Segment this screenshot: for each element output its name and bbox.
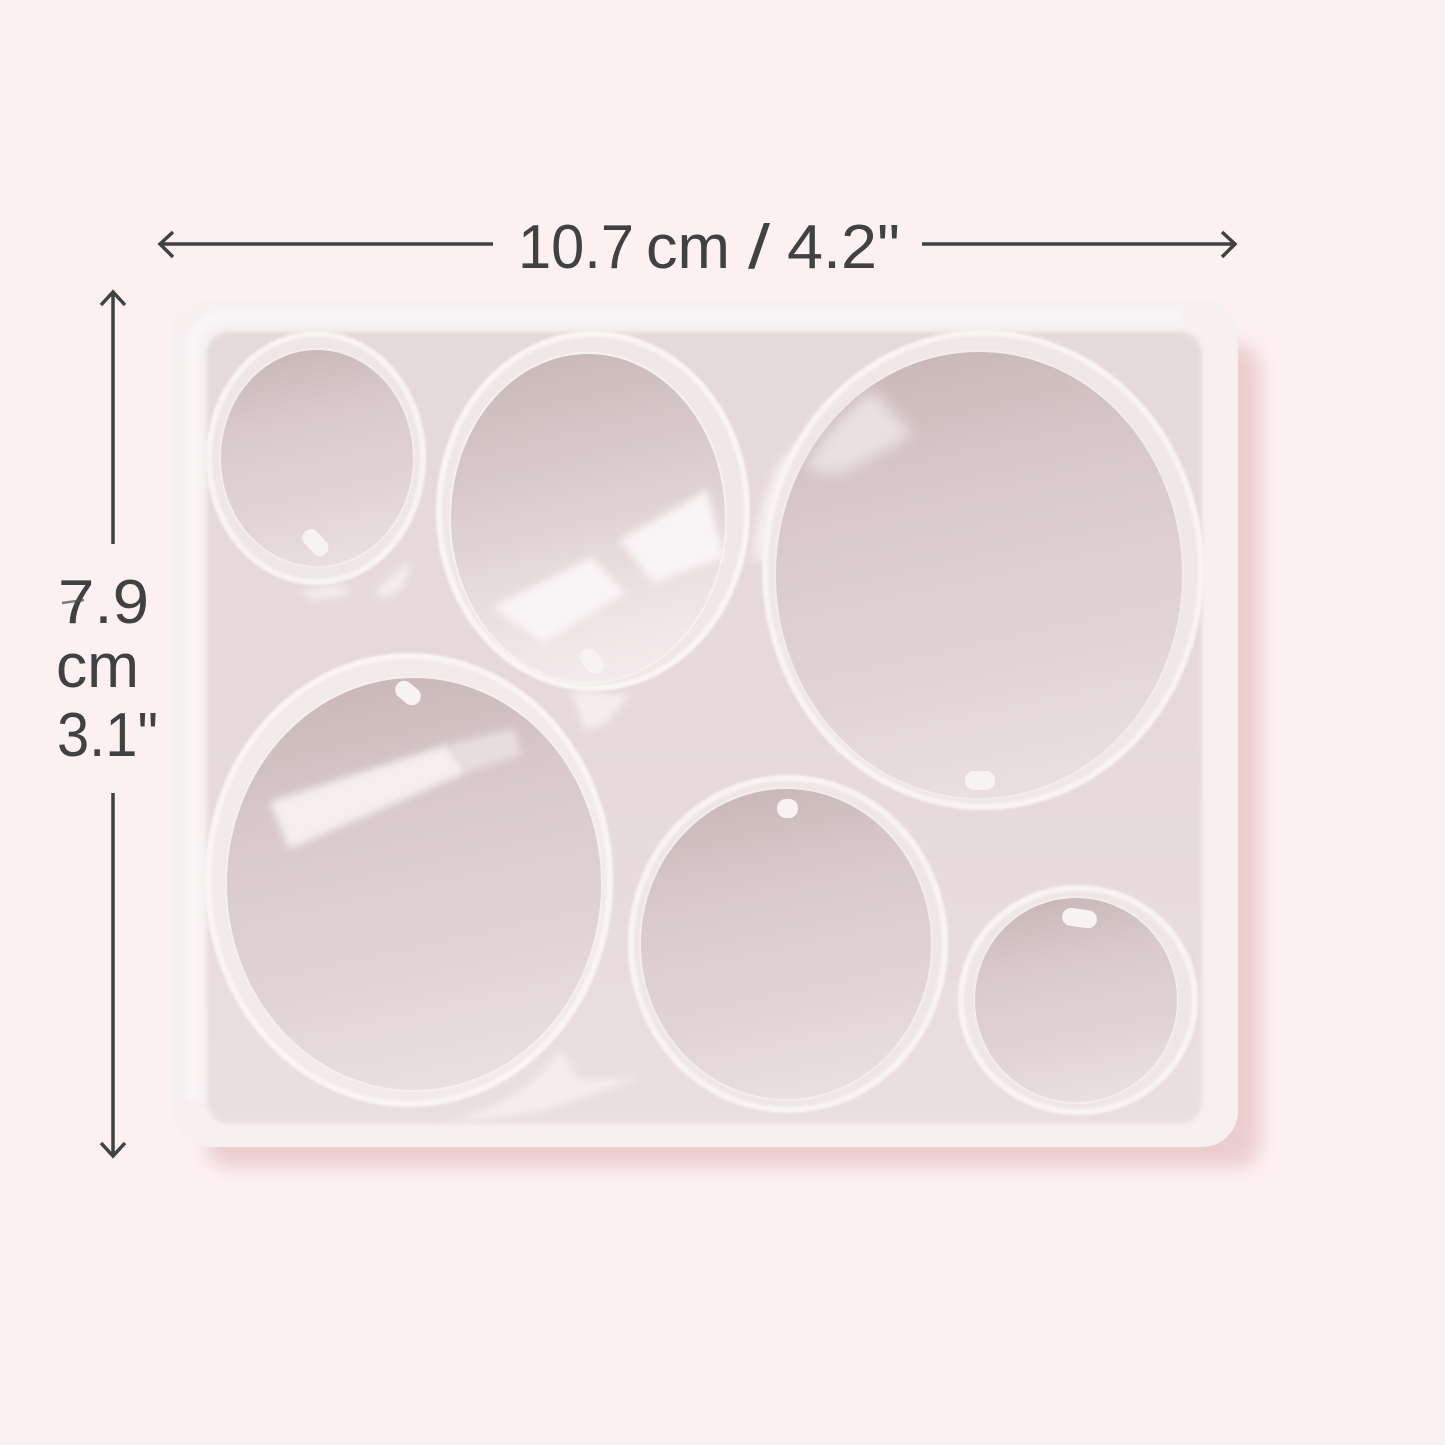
height label: 3.1" <box>57 701 158 770</box>
width label: 4.2" <box>787 213 900 282</box>
cavity: bottom right circle <box>961 888 1195 1112</box>
reflection <box>805 390 913 475</box>
width arrow left <box>160 232 493 257</box>
silicone mold <box>172 300 1238 1147</box>
cavity: top right circle <box>765 333 1201 807</box>
height dimension <box>56 292 158 1156</box>
lens <box>775 351 1183 799</box>
height label: cm <box>56 632 139 701</box>
ring <box>631 778 945 1110</box>
height label <box>56 568 158 770</box>
height label: 7.9 <box>58 568 149 637</box>
mold shadow <box>206 345 1260 1167</box>
rim highlight <box>193 316 1180 1100</box>
window reflection <box>493 490 724 643</box>
width dimension <box>160 213 1235 282</box>
width arrow right <box>922 232 1235 257</box>
width label: cm <box>646 213 730 282</box>
floor reflection streaks <box>300 395 830 1125</box>
width label: 10.7 <box>518 213 634 282</box>
cavity: top left circle <box>209 334 423 582</box>
lens <box>974 897 1178 1103</box>
lens <box>220 349 414 567</box>
hanging peg <box>391 677 425 709</box>
mold outer tray <box>172 300 1238 1147</box>
lens <box>450 353 726 683</box>
ring <box>208 656 610 1104</box>
hanging peg <box>777 799 798 818</box>
ring <box>439 334 747 688</box>
lens <box>640 788 932 1100</box>
window reflection <box>446 728 522 772</box>
width label: / <box>748 213 771 282</box>
hanging peg <box>965 771 995 790</box>
lens <box>226 677 602 1091</box>
mold inner floor <box>207 332 1202 1124</box>
cavity: top middle circle <box>439 334 747 688</box>
cavity: bottom middle circle <box>631 778 945 1110</box>
ring <box>961 888 1195 1112</box>
hanging peg <box>576 644 608 678</box>
smudge on the seven <box>62 600 84 603</box>
height arrow bottom <box>101 793 125 1156</box>
hanging peg <box>299 526 332 560</box>
height arrow top <box>101 292 125 544</box>
ring <box>209 334 423 582</box>
hanging peg <box>1061 907 1098 929</box>
ring <box>765 333 1201 807</box>
cavity: bottom left circle <box>208 656 610 1104</box>
